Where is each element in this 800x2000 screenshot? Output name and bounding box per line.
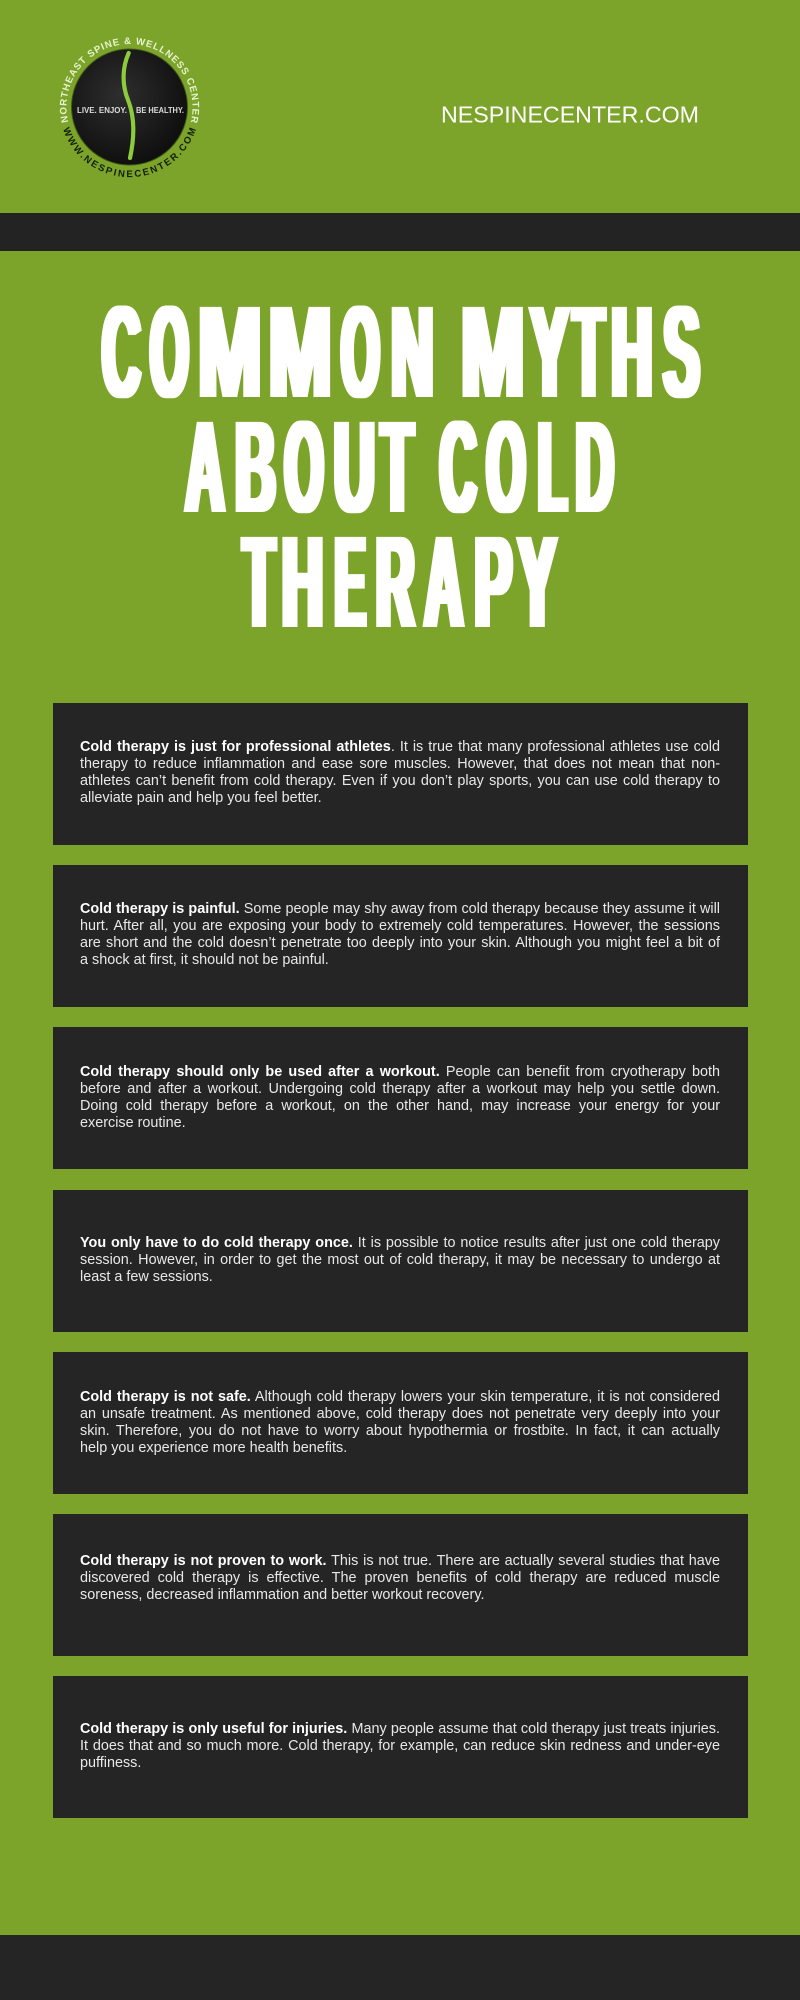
panel: just for athletes: Cold therapy is just for professional athletes. It is true that many professional athletes use cold: [80, 739, 720, 755]
title: N: [391, 278, 433, 425]
panel: only once: session. However, in order to get the most out of cold therapy, it may be necessary to undergo at: [80, 1252, 720, 1268]
title: O: [150, 278, 188, 425]
title: L: [538, 393, 567, 540]
panel: after a workout: exercise routine.: [80, 1115, 186, 1131]
title: O: [341, 278, 379, 425]
title: H: [612, 278, 652, 425]
panel: only once: least a few sessions.: [80, 1269, 213, 1285]
panel: not proven: soreness, decreased inflammation and better workout recovery.: [80, 1587, 484, 1603]
panel: not proven: discovered cold therapy is effective. The proven benefits of cold therapy are reduced muscle: [80, 1570, 720, 1586]
title: D: [576, 393, 614, 540]
panel: not proven: [53, 1514, 748, 1656]
title: T: [243, 508, 275, 655]
panel: painful: [53, 865, 748, 1007]
title: M: [198, 278, 262, 425]
title: R: [376, 508, 414, 655]
title: A: [186, 393, 224, 540]
panel: not safe: an unsafe treatment. As mentioned above, cold therapy does not penetrate very deeply into your: [80, 1406, 720, 1422]
panel: not safe: [53, 1352, 748, 1494]
panel: painful: Cold therapy is painful. Some people may shy away from cold therapy because they assume it will: [80, 901, 720, 917]
panel: after a workout: Cold therapy should only be used after a workout. People can benefit from cryotherapy both: [80, 1064, 720, 1080]
website address: NESPINECENTER.COM: [441, 102, 699, 128]
panel: only once: [53, 1190, 748, 1332]
logo: Northeast Spine & Wellness Center: BE HEALTHY.: [136, 105, 184, 115]
panel: just for athletes: alleviate pain and help you feel better.: [80, 790, 322, 806]
panel: only for injuries: Cold therapy is only useful for injuries. Many people assume that cold therapy just treats injuries.: [80, 1721, 720, 1737]
title: Y: [518, 508, 556, 655]
bottom dark band: [0, 1935, 800, 2000]
title: P: [475, 508, 512, 655]
title: E: [335, 508, 365, 655]
panel: just for athletes: athletes can’t benefit from cold therapy. Even if you don’t play sports, you can use cold therapy to: [80, 773, 720, 789]
panel: painful: are short and the cold doesn’t penetrate too deeply into your skin. Although you might feel a bit of: [80, 935, 720, 951]
title: A: [425, 508, 463, 655]
title: H: [282, 508, 323, 655]
panel: only once: You only have to do cold therapy once. It is possible to notice results after just one cold therapy: [80, 1235, 720, 1251]
panel: only for injuries: It does that and so much more. Cold therapy, for example, can reduce skin redness and under-eye: [80, 1738, 720, 1754]
logo: Northeast Spine & Wellness Center: WWW.NESPINECENTER.COM: [64, 126, 196, 178]
title: T: [573, 278, 604, 425]
title: O: [285, 393, 323, 540]
panel: not safe: help you experience more health benefits.: [80, 1440, 347, 1456]
logo: Northeast Spine & Wellness Center: [60, 37, 200, 178]
title: M: [269, 278, 332, 425]
title: B: [235, 393, 276, 540]
panel: just for athletes: therapy to reduce inflammation and ease sore muscles. However, that does not mean that non-: [80, 756, 720, 772]
title: U: [334, 393, 375, 540]
title: S: [664, 278, 699, 425]
title: T: [381, 393, 413, 540]
panel: after a workout: Doing cold therapy before a workout, on the other hand, may increase your energy for your: [80, 1098, 720, 1114]
panel: painful: a shock at first, it should not be painful.: [80, 952, 329, 968]
title: O: [487, 393, 525, 540]
title: Y: [530, 278, 569, 425]
title: [100, 278, 701, 655]
panel: not safe: Cold therapy is not safe. Although cold therapy lowers your skin temperature, it is not considered: [80, 1389, 720, 1405]
title: C: [102, 278, 140, 425]
panel: only for injuries: puffiness.: [80, 1755, 141, 1771]
top dark band: [0, 213, 800, 251]
panel: after a workout: before and after a workout. Undergoing cold therapy after a workout may help you settle down.: [80, 1081, 720, 1097]
logo: Northeast Spine & Wellness Center: LIVE. ENJOY.: [77, 105, 127, 115]
panel: not proven: Cold therapy is not proven to work. This is not true. There are actually several studies that have: [80, 1553, 720, 1569]
panel: only for injuries: [53, 1676, 748, 1818]
title: M: [461, 278, 524, 425]
title: C: [440, 393, 476, 540]
panel: painful: hurt. After all, you are exposing your body to extremely cold temperatures. However, the sessions: [80, 918, 720, 934]
panel: after a workout: [53, 1027, 748, 1169]
panel: not safe: skin. Therefore, you do not have to worry about hypothermia or frostbite. In fact, it can actually: [80, 1423, 720, 1439]
logo: Northeast Spine & Wellness Center: NORTHEAST SPINE & WELLNESS CENTER: [60, 37, 200, 123]
panel: just for athletes: [53, 703, 748, 845]
